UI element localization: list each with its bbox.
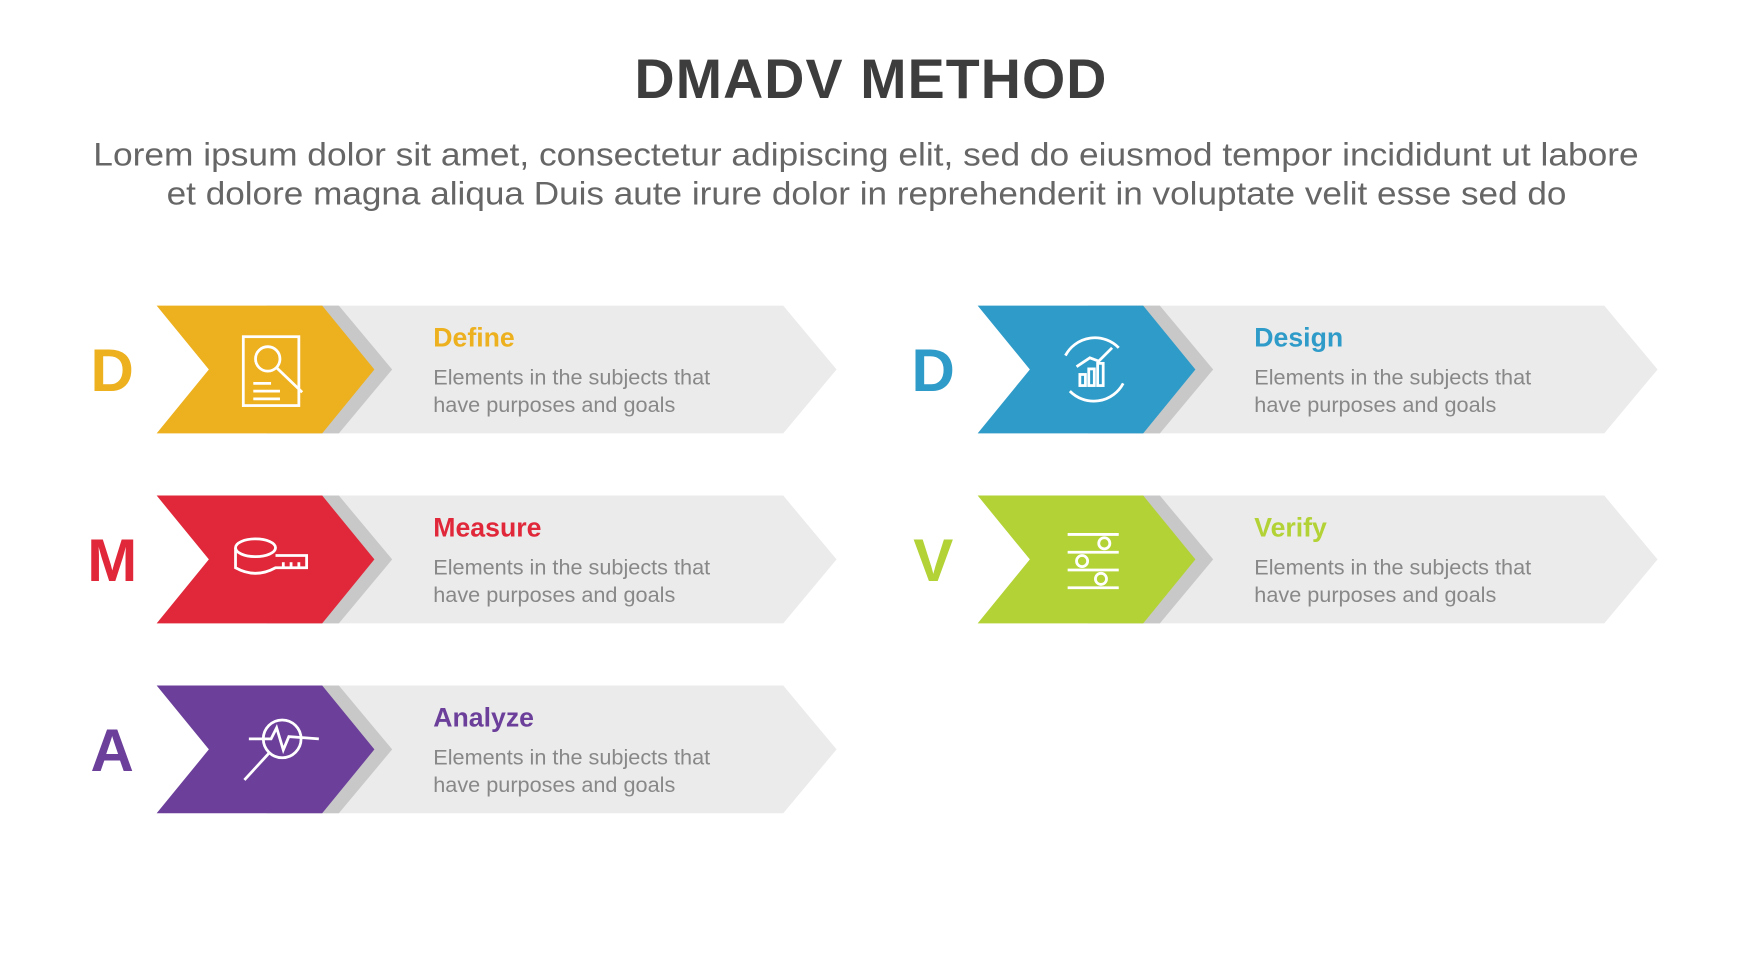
panel: measure: M xyxy=(87,527,137,594)
panel: define: have purposes and goals xyxy=(433,392,675,417)
panel: measure: have purposes and goals xyxy=(433,582,675,607)
panel: verify: V xyxy=(913,527,953,594)
panel: analyze: have purposes and goals xyxy=(433,772,675,797)
panel: analyze xyxy=(91,686,837,813)
panel: analyze: Elements in the subjects that xyxy=(433,744,710,769)
subtitle xyxy=(93,137,1639,211)
icon: growth cycle xyxy=(1065,338,1123,401)
panel: design xyxy=(912,306,1658,433)
panel: define xyxy=(91,306,837,433)
icon: magnifier chart xyxy=(244,720,319,780)
panel: verify xyxy=(913,496,1658,623)
icon: document search xyxy=(243,337,302,406)
panel: measure: Measure xyxy=(433,513,541,543)
subtitle: Lorem ipsum dolor sit amet, consectetur adipiscing elit, sed do eiusmod tempor incididunt ut labore xyxy=(93,137,1639,173)
panel: define: Elements in the subjects that xyxy=(433,364,710,389)
panel: design: have purposes and goals xyxy=(1254,392,1496,417)
panel: measure: Elements in the subjects that xyxy=(433,554,710,579)
panel: design: Design xyxy=(1254,323,1343,353)
icon: sliders xyxy=(1068,534,1119,588)
panel: measure xyxy=(87,496,837,623)
panel: verify: Verify xyxy=(1254,513,1327,543)
panel: define: D xyxy=(91,337,134,404)
subtitle: et dolore magna aliqua Duis aute irure dolor in reprehenderit in voluptate velit esse sed do xyxy=(167,175,1566,211)
panel: design: D xyxy=(912,337,955,404)
panel: analyze: Analyze xyxy=(433,703,534,733)
title: DMADV METHOD xyxy=(635,48,1107,110)
panel: define: Define xyxy=(433,323,515,353)
panel: design: Elements in the subjects that xyxy=(1254,364,1531,389)
panel: verify: Elements in the subjects that xyxy=(1254,554,1531,579)
icon: tape measure xyxy=(236,539,307,573)
panel: analyze: A xyxy=(91,717,134,784)
panel: verify: have purposes and goals xyxy=(1254,582,1496,607)
